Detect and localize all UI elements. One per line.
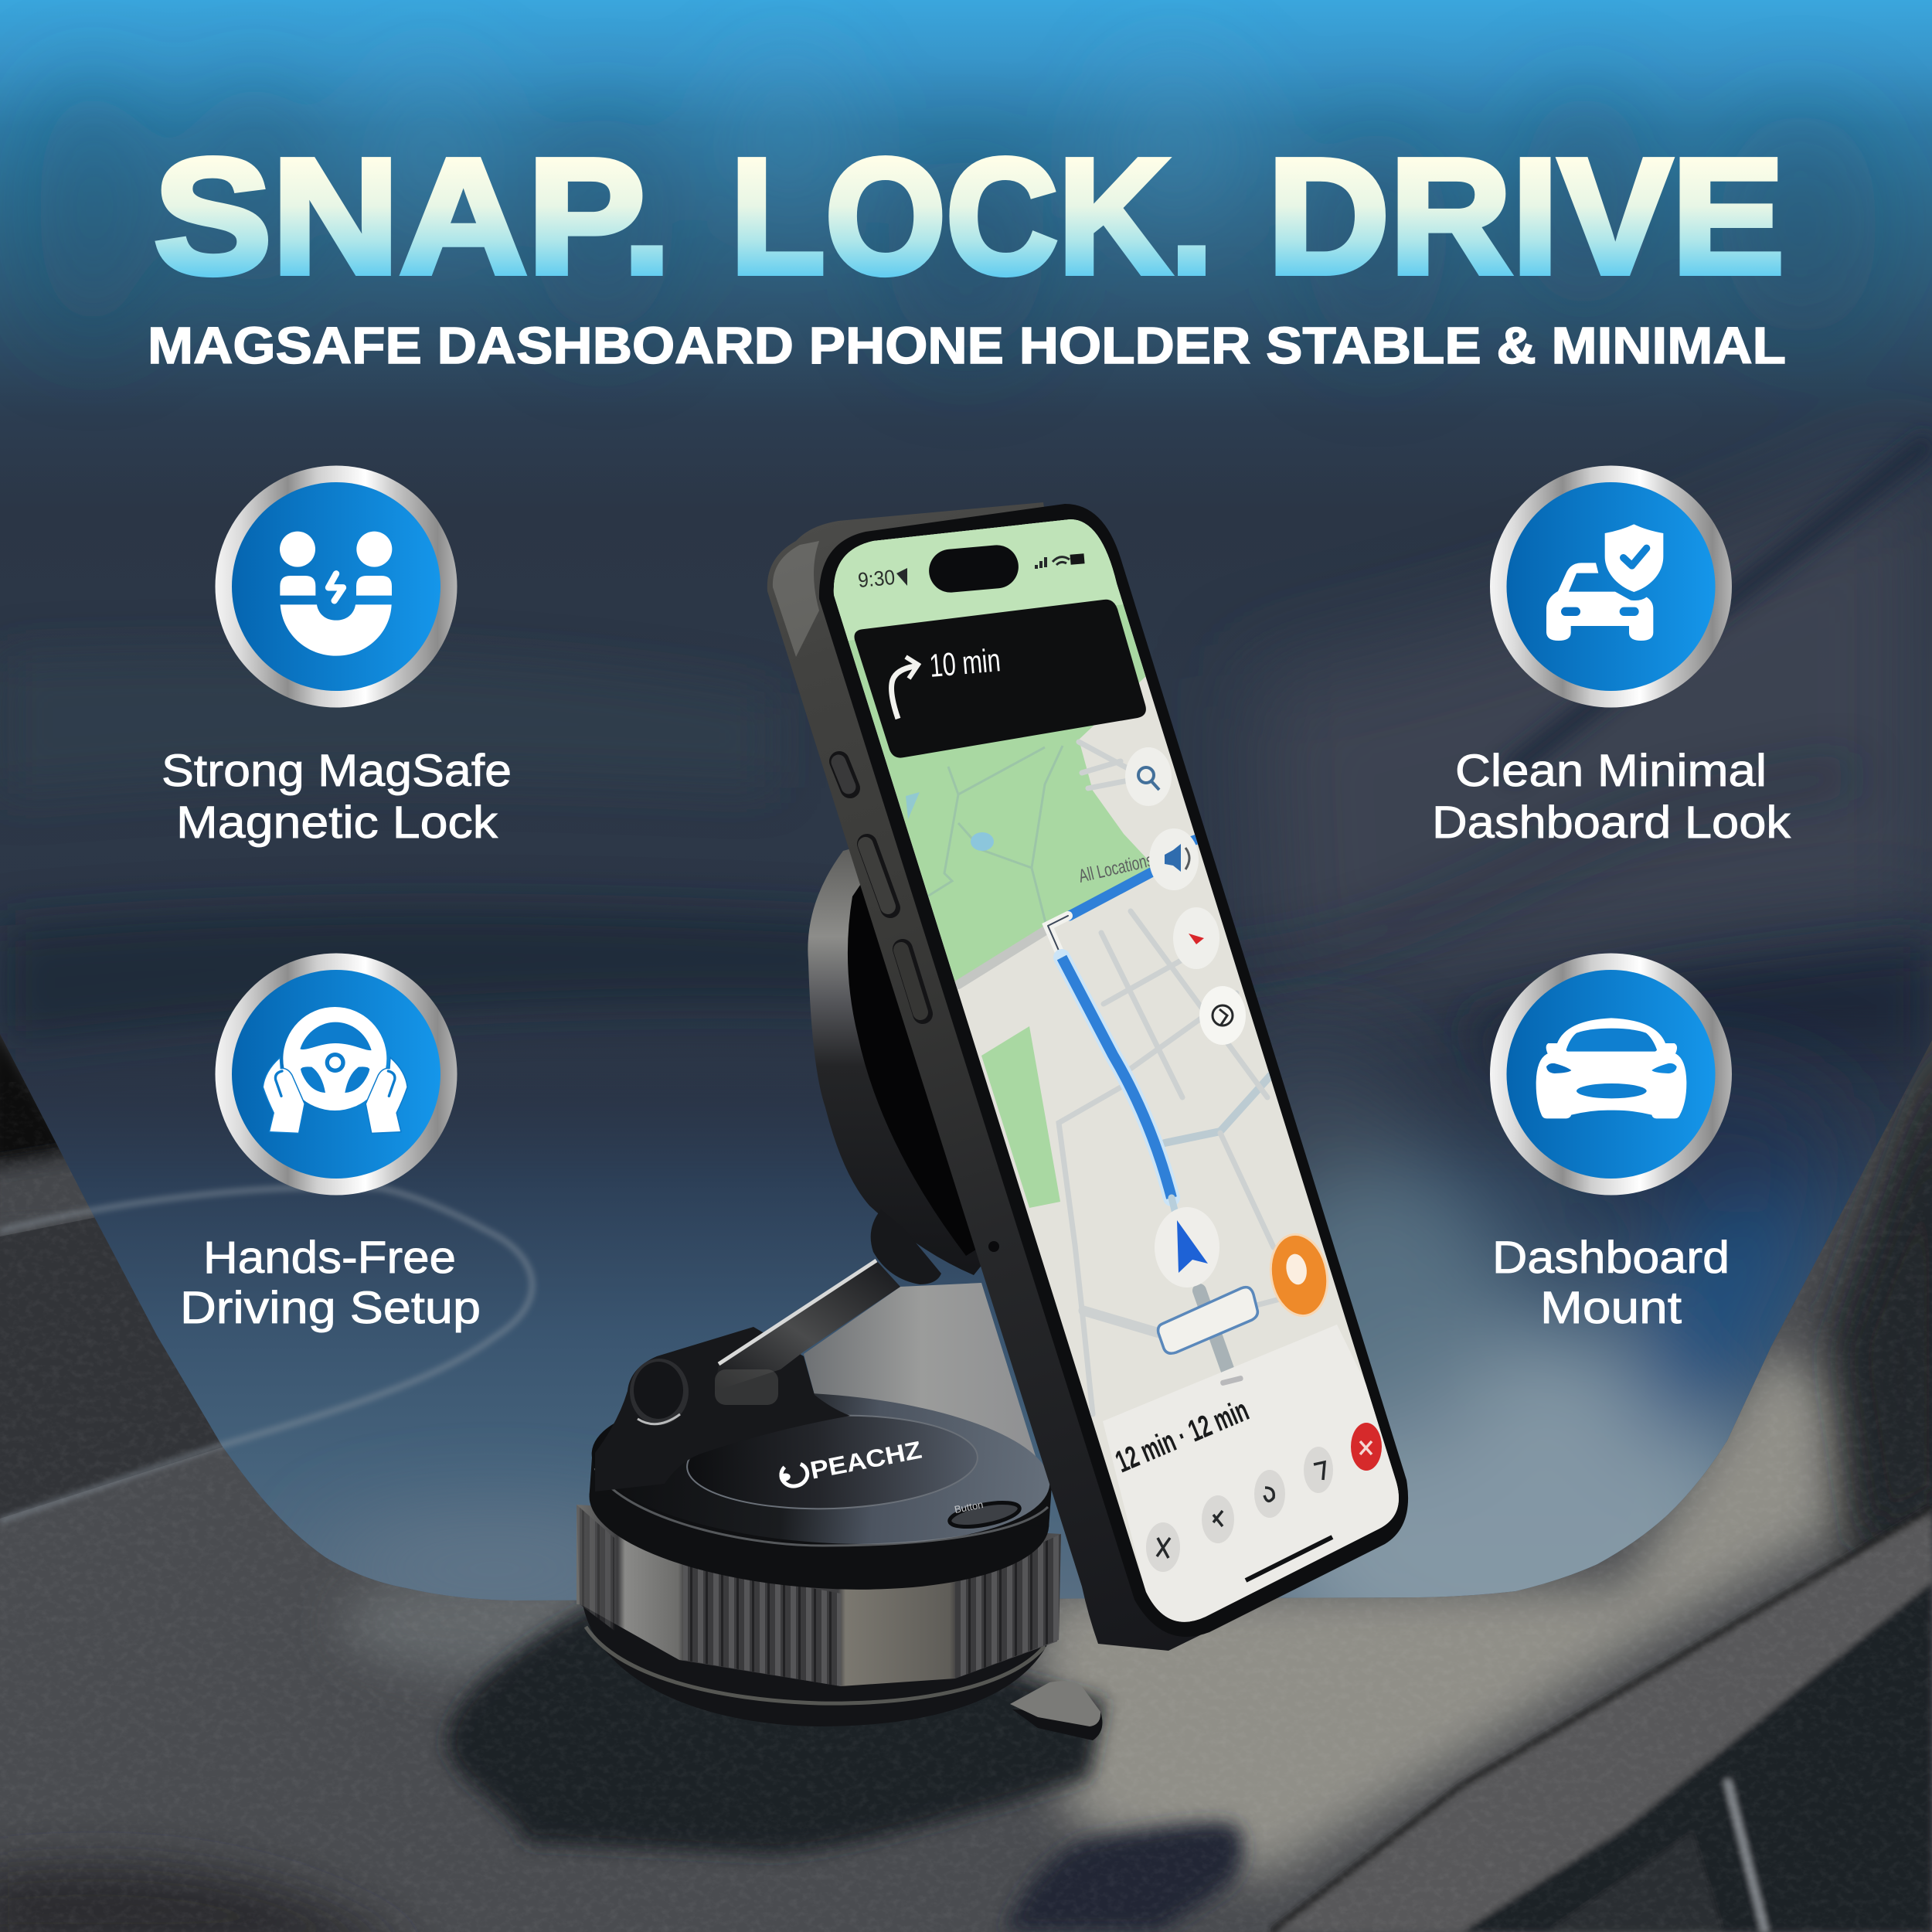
brand logo	[777, 1436, 923, 1491]
feature label: clean minimal	[1432, 746, 1791, 848]
street name pill	[1158, 1287, 1257, 1353]
icon: car and shield check	[1546, 524, 1663, 641]
grey roads	[958, 742, 1283, 1414]
product: smartphone	[767, 502, 1437, 1651]
feature label: dashboard mount: Dashboard	[1492, 1233, 1730, 1283]
base lip	[584, 1417, 1054, 1604]
suction cup bottom disc	[581, 1592, 1059, 1726]
pivot knob	[630, 1359, 689, 1425]
status bar: 9:30	[857, 566, 896, 592]
bottom sheet	[1103, 1325, 1437, 1646]
center disc	[685, 1410, 979, 1514]
navigation banner: 10 min	[928, 641, 1002, 684]
feature badge: magnet	[215, 465, 457, 708]
destination pin	[1264, 1230, 1334, 1320]
feature badge: steering wheel	[215, 954, 457, 1195]
subtitle: MAGSAFE DASHBOARD PHONE HOLDER STABLE & MINIMAL	[148, 317, 1786, 375]
phone side buttons	[838, 761, 923, 1014]
ball joint	[871, 1209, 941, 1284]
mount cast shadow	[446, 1607, 1105, 1855]
phone screen	[833, 519, 1399, 1622]
power button	[947, 1498, 1022, 1532]
phone side frame	[767, 502, 1209, 1651]
dashboard leather outside swoosh	[0, 1034, 1932, 1932]
blue swoosh panel behind product	[35, 1046, 1889, 1600]
feature label: hands-free: Driving Setup	[180, 1283, 481, 1333]
feature label: magnetic lock: Strong MagSafe	[162, 746, 512, 796]
title	[154, 124, 1784, 308]
feature label: dashboard mount	[1492, 1233, 1730, 1333]
base top surface	[587, 1379, 1055, 1558]
status bar	[857, 553, 1085, 592]
green status area	[833, 519, 1150, 984]
feature label: magnetic lock	[162, 746, 512, 848]
icon: magnet with lightning bolt	[280, 532, 392, 656]
location arrow	[1155, 1207, 1219, 1287]
product: dashboard mount stand	[577, 1260, 1102, 1740]
feature label: magnetic lock: Magnetic Lock	[176, 798, 498, 848]
feature badge: car with shield	[1490, 465, 1732, 708]
feature label: dashboard mount: Mount	[1540, 1283, 1682, 1333]
map details	[927, 746, 1063, 929]
release tab	[1010, 1681, 1102, 1740]
telescopic arm	[715, 1260, 900, 1405]
arm shoulder	[595, 1327, 850, 1492]
dynamic island	[927, 543, 1020, 594]
map tool buttons	[1125, 747, 1246, 1045]
bottom sheet action buttons	[1146, 1423, 1382, 1572]
title: DRIVE	[1267, 124, 1784, 308]
feature label: clean minimal: Clean Minimal	[1455, 746, 1767, 796]
green park	[981, 1026, 1060, 1208]
navigation banner	[855, 600, 1146, 758]
home indicator	[1246, 1537, 1332, 1580]
icon: hands on steering wheel	[264, 1007, 406, 1133]
icon: car front view	[1536, 1018, 1686, 1118]
title: LOCK.	[730, 124, 1213, 308]
curved dashboard panel line	[0, 1187, 532, 1521]
speaker hole	[988, 1241, 999, 1252]
light backdrop between arm and phone	[804, 1283, 1039, 1468]
knurled adjustment ring	[577, 1505, 1061, 1686]
blue navigation route	[1048, 836, 1206, 1229]
feature label: clean minimal: Dashboard Look	[1432, 798, 1791, 848]
title: SNAP.	[154, 124, 672, 308]
power button: Button	[954, 1498, 984, 1515]
brand logo: PEACHZ	[808, 1436, 923, 1485]
feature label: hands-free: Hands-Free	[203, 1233, 456, 1283]
feature label: hands-free	[180, 1233, 481, 1333]
feature badge: car front	[1490, 954, 1732, 1195]
dashboard ridge and vent area	[1271, 1509, 1932, 1932]
product: magsafe puck behind phone	[808, 842, 1005, 1284]
phone bezel	[819, 504, 1408, 1637]
map location label: All Locations	[1077, 849, 1155, 887]
trip duration: 12 min · 12 min	[1111, 1393, 1253, 1479]
